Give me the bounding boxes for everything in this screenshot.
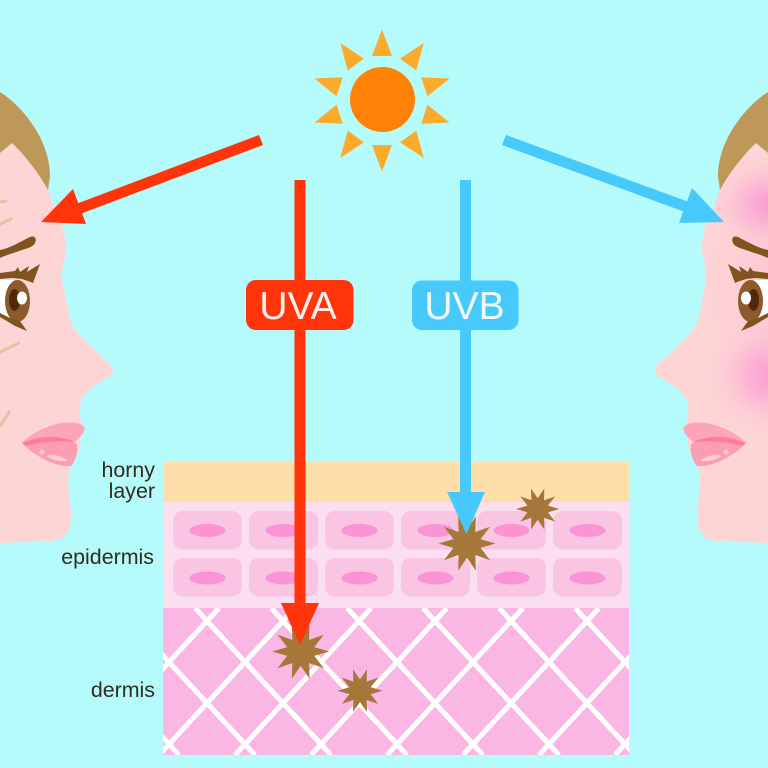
label: epidermis: epidermis <box>61 545 154 569</box>
icon: damage star at UVB tip <box>438 516 496 571</box>
right eyebrow <box>732 236 768 258</box>
right face redness <box>724 168 768 420</box>
epidermis cells <box>173 511 622 596</box>
dermis band <box>163 608 629 755</box>
arrow: UVA into dermis <box>281 180 319 645</box>
horny layer band <box>163 462 629 502</box>
arrow: UVA to left face <box>41 135 263 224</box>
left eye <box>0 264 40 331</box>
right face skin <box>655 143 768 543</box>
badge: UVB <box>412 280 518 330</box>
icon: damage star upper epidermis <box>516 489 559 529</box>
badge: UVA: UVA <box>259 285 337 328</box>
left eyebrow <box>0 236 36 258</box>
left face hair <box>0 92 50 190</box>
right eye <box>728 264 768 331</box>
badge: UVA <box>246 280 354 330</box>
cell nuclei <box>190 524 606 584</box>
left face skin <box>0 143 113 543</box>
right face: UVB sunburned skin <box>655 92 768 543</box>
arrow: UVB to right face <box>502 135 724 223</box>
epidermis band <box>163 502 629 608</box>
skin cross-section diagram <box>163 462 629 755</box>
right face hair <box>718 92 768 190</box>
icon: damage star at UVA tip <box>272 624 329 679</box>
arrow: UVB into epidermis <box>447 180 485 534</box>
left lips <box>22 423 85 466</box>
label: dermis: dermis <box>91 678 155 702</box>
label: horny layer: horny <box>101 458 155 482</box>
icon: sun <box>311 30 453 172</box>
left face wrinkles <box>0 201 19 426</box>
label: horny layer: layer <box>109 479 155 503</box>
icon: damage star in dermis <box>338 669 382 712</box>
badge: UVB: UVB <box>424 285 505 328</box>
dermis collagen lattice <box>163 608 629 755</box>
right lips <box>683 423 746 466</box>
left face: UVA wrinkled skin <box>0 92 113 543</box>
